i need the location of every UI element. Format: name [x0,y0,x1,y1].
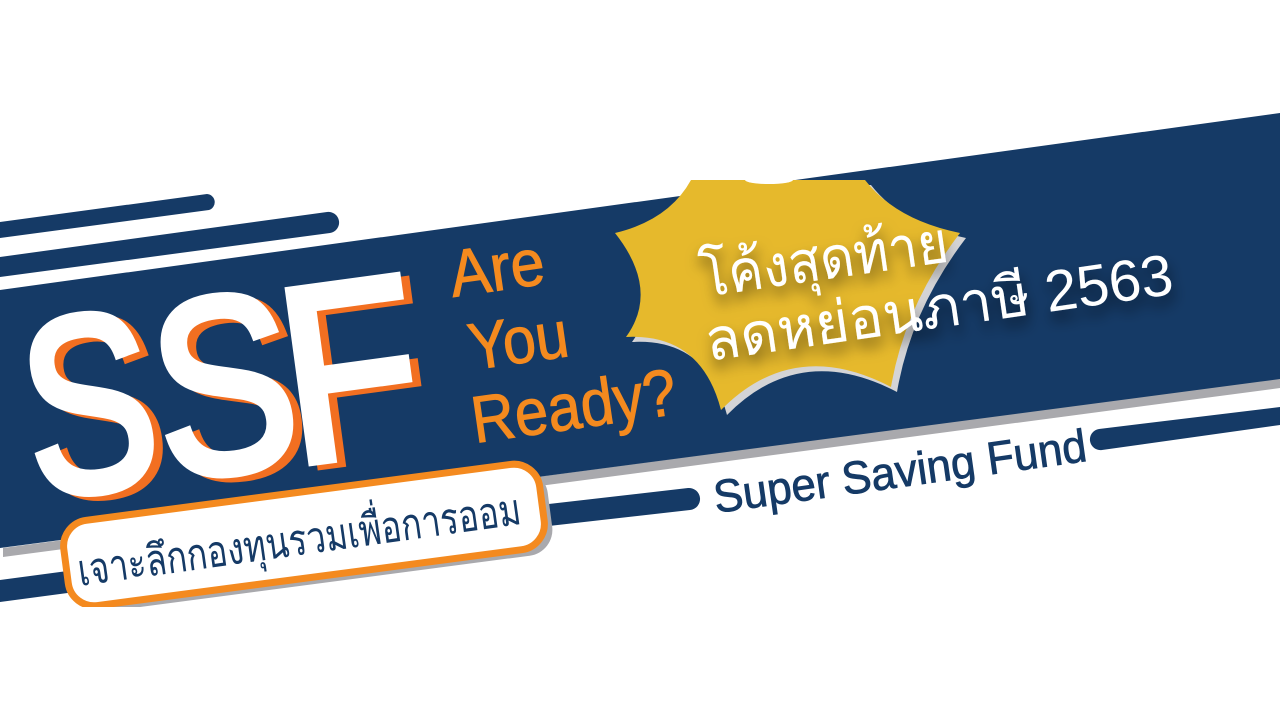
SSF title [6,223,445,555]
bottom stripes [0,407,1280,602]
Super Saving Fund subtitle: Super Saving Fund [710,419,1090,523]
top left stripes [0,194,339,277]
SSF orange shadow: F [273,227,445,521]
pill shadow [114,485,552,607]
callout pill [60,461,556,615]
SSF orange shadow: S [15,260,181,555]
SSF white letters [6,223,436,551]
SSF white letters: S [6,256,172,551]
SSF white letters: F [264,223,436,517]
Are You Ready text: Are [444,224,549,311]
pill body [60,461,548,609]
star shadow [621,185,966,415]
SSF white letters: S [136,237,312,533]
Are You Ready text [444,224,681,457]
banner grey shadow [3,378,1280,557]
SSF orange shadow [15,227,445,555]
badge headline: โค้งสุดท้าย [695,209,953,313]
pill text: เจาะลึกกองทุนรวมเพื่อการออม [74,478,524,598]
star body [615,180,960,410]
badge headline: ลดหย่อนภาษี 2563 [701,242,1177,374]
star badge [615,176,966,415]
star top notch [745,176,793,184]
main navy banner [0,113,1280,548]
Are You Ready text: Ready? [466,354,681,457]
SSF orange shadow: S [145,241,321,537]
Are You Ready text: You [463,296,573,384]
